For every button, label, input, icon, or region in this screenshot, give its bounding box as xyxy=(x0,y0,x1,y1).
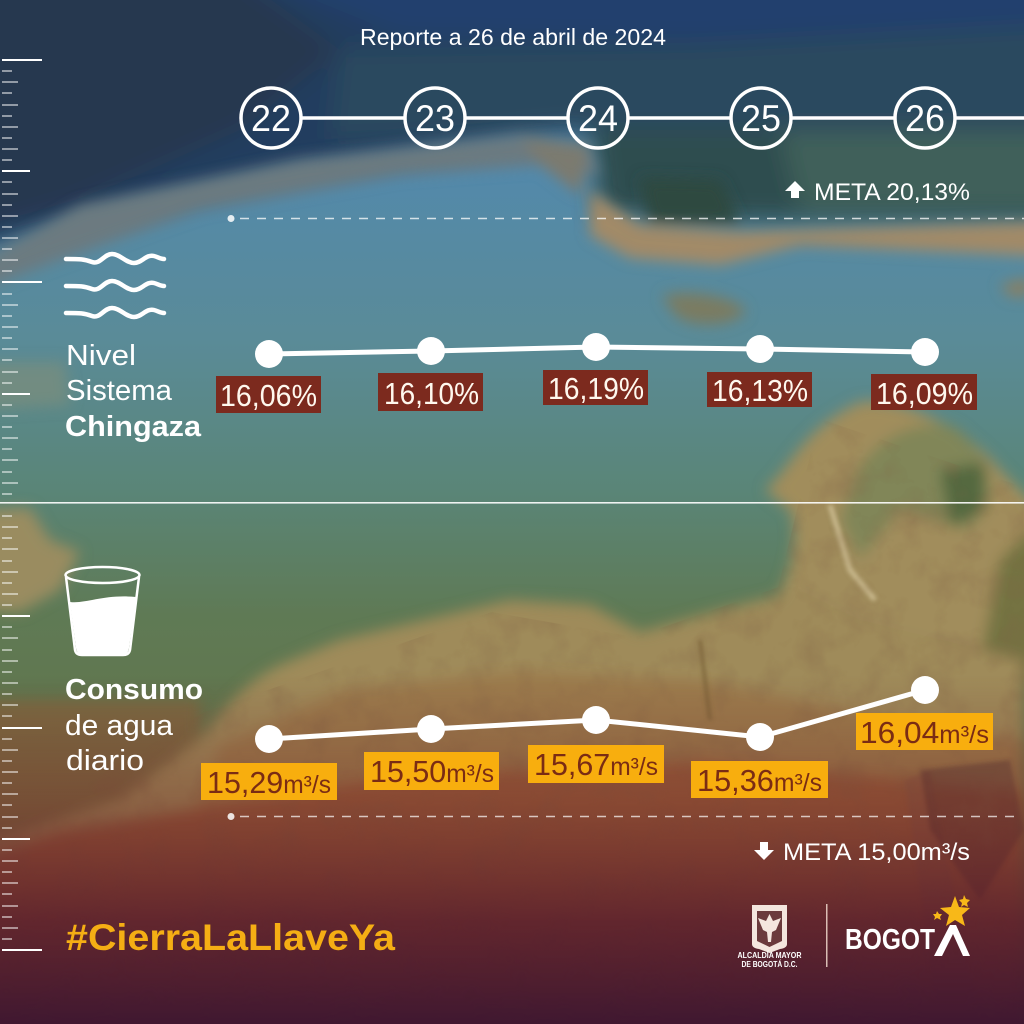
section divider line xyxy=(0,502,1024,504)
lower land xyxy=(0,590,1024,1024)
icon: water waves xyxy=(66,254,164,317)
day timeline: 23 xyxy=(415,98,455,139)
data labels: consumo m3/s xyxy=(201,713,993,800)
upper target: meta 20,13%: META 20,13% xyxy=(814,179,970,206)
lower target: meta 15,00 m3/s: META 15,00m³/s xyxy=(783,839,970,866)
hashtag: #CierraLaLlaveYa xyxy=(66,917,395,958)
line chart: nivel sistema xyxy=(255,333,939,368)
upper target: meta 20,13% xyxy=(228,179,1024,222)
day timeline: 22 xyxy=(251,98,291,139)
label: Consumo de agua diario: de agua xyxy=(65,710,174,742)
icon: glass of water xyxy=(66,567,140,655)
label: Nivel Sistema Chingaza: Chingaza xyxy=(65,411,202,443)
label: Nivel Sistema Chingaza: Nivel xyxy=(66,340,136,372)
logo: Alcaldía Mayor de Bogotá: DE BOGOTÁ D.C. xyxy=(742,960,798,969)
data labels: consumo m3/s: 16,04m³/s xyxy=(860,715,989,750)
logo: Alcaldía Mayor de Bogotá: ALCALDÍA MAYOR xyxy=(738,951,802,960)
label: Consumo de agua diario xyxy=(65,674,203,777)
shore band xyxy=(0,135,600,290)
report date heading: Reporte a 26 de abril de 2024 xyxy=(360,24,666,50)
day timeline: 26 xyxy=(905,98,945,139)
logo divider xyxy=(826,904,828,967)
label: Consumo de agua diario: Consumo xyxy=(65,674,203,706)
data labels: nivel percent: 16,13% xyxy=(712,373,808,408)
day timeline: 25 xyxy=(741,98,781,139)
label: Nivel Sistema Chingaza xyxy=(65,340,202,443)
data labels: nivel percent: 16,19% xyxy=(548,371,644,406)
logo: Bogotá with stars: BOGOT xyxy=(845,924,935,956)
data labels: consumo m3/s: 15,36m³/s xyxy=(697,763,822,798)
day timeline: 24 xyxy=(578,98,618,139)
data labels: consumo m3/s: 15,67m³/s xyxy=(534,747,658,782)
data labels: consumo m3/s: 15,50m³/s xyxy=(370,754,494,789)
data labels: consumo m3/s: 15,29m³/s xyxy=(207,765,331,800)
data labels: nivel percent: 16,06% xyxy=(220,378,317,413)
lower target: meta 15,00 m3/s xyxy=(228,813,1016,866)
data labels: nivel percent: 16,09% xyxy=(876,376,973,411)
label: Consumo de agua diario: diario xyxy=(66,745,144,777)
day timeline xyxy=(241,88,1024,148)
line chart: consumo xyxy=(255,676,939,753)
data labels: nivel percent xyxy=(216,370,977,413)
logo: Alcaldía Mayor de Bogotá xyxy=(738,905,802,969)
data labels: nivel percent: 16,10% xyxy=(384,376,479,411)
right peninsula xyxy=(700,401,1024,1024)
ruler scale ticks xyxy=(2,60,42,950)
logo: Bogotá with stars xyxy=(845,895,970,956)
label: Nivel Sistema Chingaza: Sistema xyxy=(66,375,173,407)
